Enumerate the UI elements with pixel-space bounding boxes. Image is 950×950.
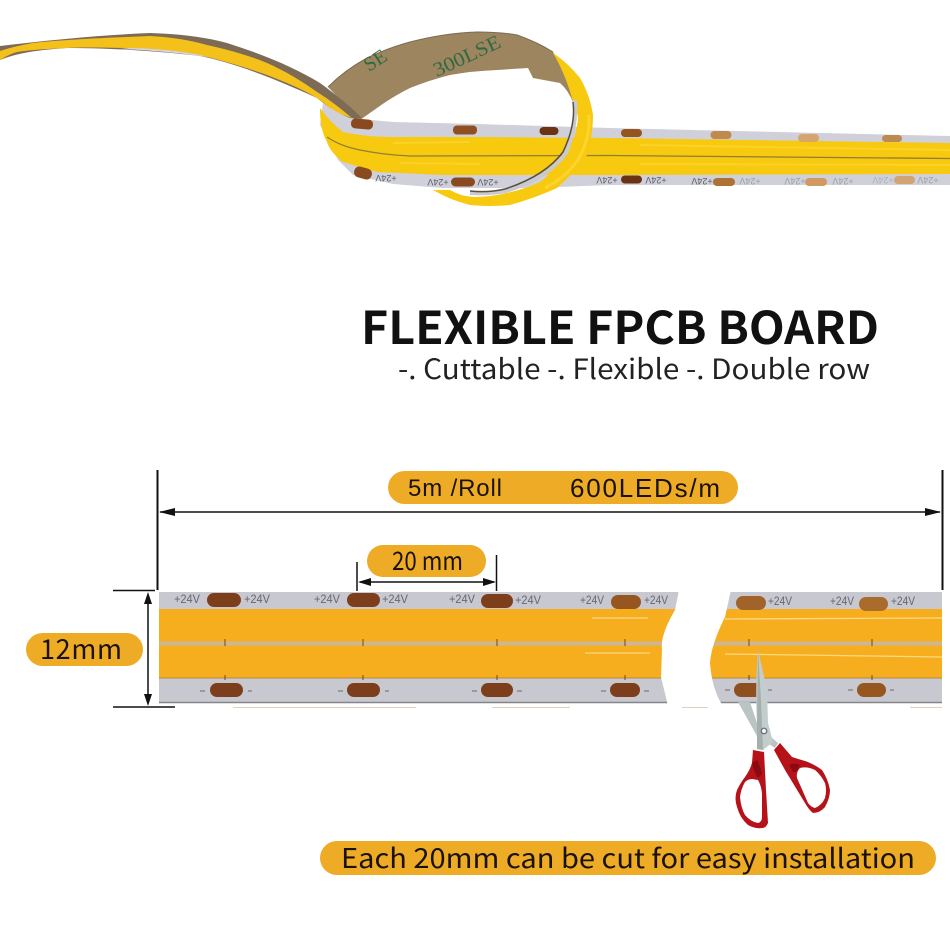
main strip body	[320, 103, 950, 188]
adhesive backing loop	[328, 31, 576, 135]
wavy break	[661, 590, 731, 706]
+24V labels: +24V	[314, 594, 340, 606]
pill: roll length and LED density: 5m /Roll	[408, 475, 502, 502]
title: FLEXIBLE FPCB BOARD	[361, 292, 879, 357]
coiled LED strip photo	[0, 31, 950, 206]
strip highlights	[585, 618, 942, 657]
pill: roll length and LED density: 600LEDs/m	[570, 473, 720, 503]
strip voltage marks: +24V	[872, 175, 894, 185]
+24V labels: +24V	[244, 594, 270, 606]
callout pill: cutting note: Each 20mm can be cut for easy installation	[341, 837, 915, 876]
pad dashes and cut marks	[200, 639, 894, 691]
strip voltage marks: +24V	[477, 177, 499, 187]
+24V labels: +24V	[580, 595, 604, 607]
+24V labels: +24V	[768, 596, 792, 608]
front blade	[756, 650, 773, 750]
backing print fragment: SE	[360, 45, 391, 76]
strip voltage marks: +24V	[645, 175, 667, 185]
+24V labels: +24V	[830, 596, 854, 608]
strip voltage marks: +24V	[427, 177, 449, 187]
+24V labels: +24V	[382, 594, 408, 606]
contact pads	[207, 593, 888, 697]
length dimension: 5m roll	[158, 470, 942, 590]
right handle	[774, 743, 830, 813]
strip voltage marks: +24V	[739, 176, 761, 186]
pitch dimension: 20 mm	[357, 542, 496, 591]
faint lower edge marks	[233, 706, 942, 708]
thin strip tail	[0, 33, 362, 120]
pill: roll length and LED density	[388, 471, 738, 504]
strip voltage marks	[375, 173, 939, 187]
icon: scissors	[736, 650, 830, 828]
back blade	[738, 702, 778, 748]
strip voltage marks: +24V	[691, 176, 713, 186]
strip voltage marks: +24V	[596, 175, 618, 185]
+24V labels: +24V	[515, 595, 541, 607]
yellow ring	[430, 53, 593, 206]
+24V labels: +24V	[891, 596, 915, 608]
contact pads	[351, 118, 915, 186]
pill: 20 mm: 20 mm	[392, 542, 463, 578]
handle shading	[752, 760, 800, 778]
backing print 300LSE: 300LSE	[430, 31, 504, 82]
+24V labels: +24V	[174, 594, 200, 606]
strip voltage marks: +24V	[832, 176, 854, 186]
subtitle: -. Cuttable -. Flexible -. Double row	[398, 348, 870, 388]
strip voltage marks: +24V	[784, 176, 806, 186]
strip voltage marks: +24V	[375, 173, 397, 183]
straight LED strip diagram	[159, 590, 942, 708]
pill: 12mm: 12mm	[40, 628, 122, 667]
width dimension: 12mm	[26, 590, 175, 707]
left handle	[736, 750, 768, 828]
+24V labels	[174, 594, 915, 608]
strip voltage marks: +24V	[917, 175, 939, 185]
+24V labels: +24V	[449, 594, 475, 606]
+24V labels: +24V	[644, 595, 668, 607]
